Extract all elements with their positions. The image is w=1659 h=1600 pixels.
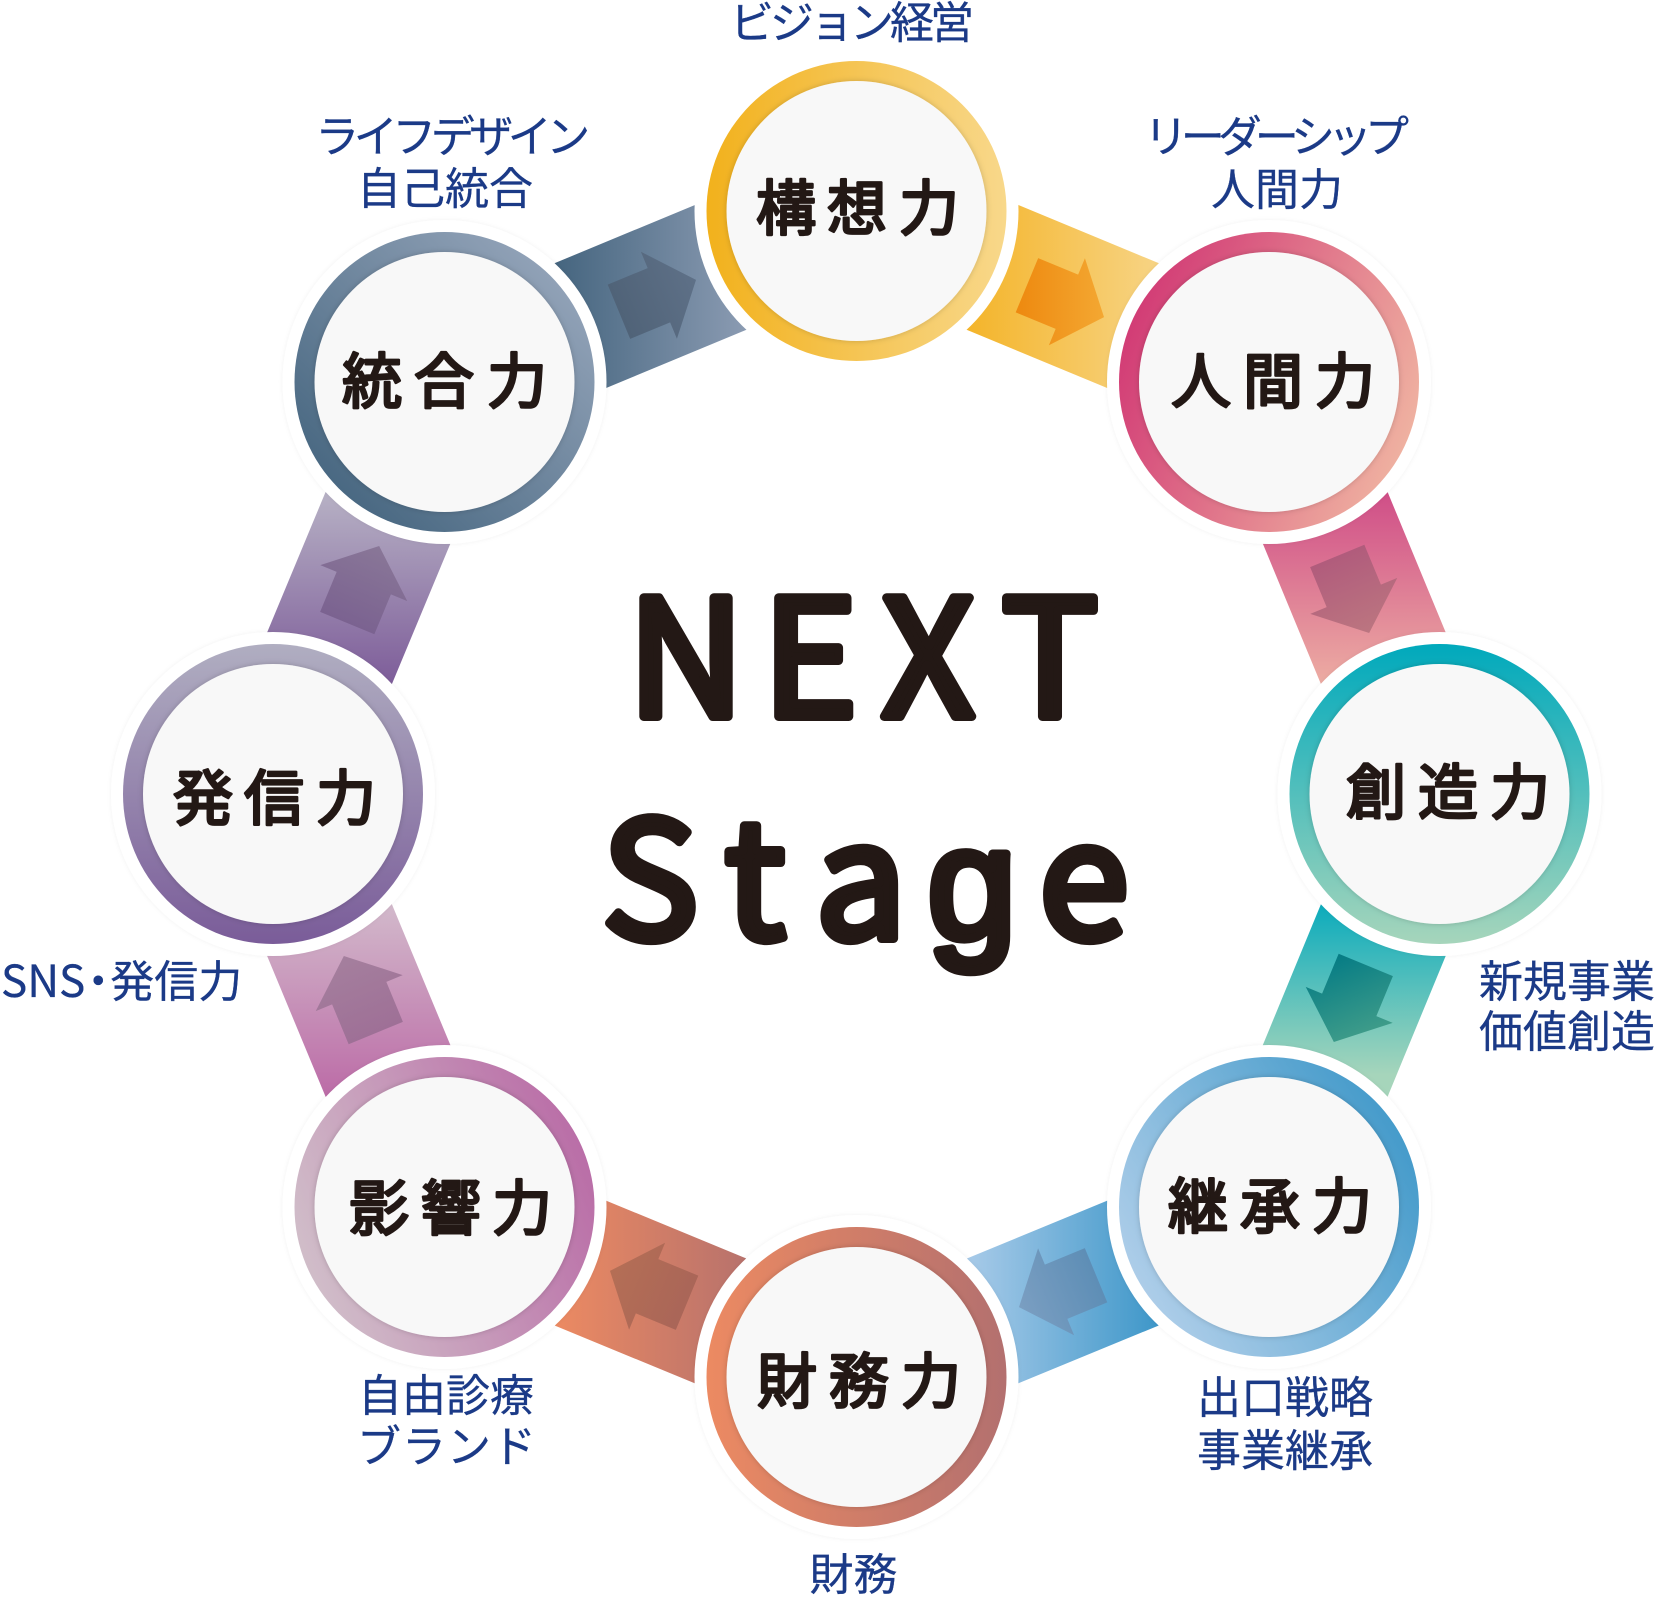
label: リーダーシップ 人間力: リーダーシップ [1144,101,1409,165]
label: SNS・発信力: SNS・発信力 [1,946,242,1010]
circle: 統合力 [282,220,606,544]
label: 出口戦略 事業継承: 出口戦略 [1197,1362,1373,1426]
label: ライフデザイン 自己統合 [315,101,587,217]
circle: 人間力 [1107,220,1431,544]
circle: 人間力: 人間力 [1171,334,1375,421]
label: 自由診療 ブランド [357,1360,537,1475]
center title: NEXT [627,528,1099,764]
label: 出口戦略 事業継承: 事業継承 [1197,1415,1373,1479]
label: ライフデザイン 自己統合: 自己統合 [357,153,533,217]
circle: 財務力 [694,1215,1018,1539]
connector band: 創造力 to 継承力 [1207,768,1502,1233]
label: 自由診療 ブランド: ブランド [357,1411,537,1475]
center title: Stage [602,750,1129,986]
connector band: 人間力 to 創造力 [1207,356,1502,820]
label: ライフデザイン 自己統合: ライフデザイン [315,101,587,165]
label: 新規事業 価値創造 [1479,946,1655,1060]
circle: 継承力 [1107,1045,1431,1369]
circle: 影響力 [282,1045,606,1369]
circle: 創造力 [1278,632,1602,956]
circle: 統合力: 統合力 [342,334,547,421]
circle: 構想力: 構想力 [756,161,959,248]
connector band: 財務力 to 影響力 [419,1145,882,1439]
label: 自由診療 ブランド: 自由診療 [358,1360,534,1424]
label: 新規事業 価値創造: 新規事業 [1479,946,1655,1010]
connector band: 発信力 to 統合力 [211,356,507,820]
circle: 発信力: 発信力 [173,751,376,838]
label: 新規事業 価値創造: 価値創造 [1479,996,1655,1060]
circle: 創造力: 創造力 [1346,745,1550,832]
connector band: 統合力 to 構想力 [419,149,882,444]
circle: 構想力 [694,49,1018,373]
circle: 財務力: 財務力 [757,1334,961,1421]
circle: 発信力 [111,632,435,956]
connector band: 影響力 to 発信力 [211,768,507,1233]
label: リーダーシップ 人間力: 人間力 [1211,154,1343,218]
center title [602,528,1129,986]
connector band: 継承力 to 財務力 [831,1145,1295,1439]
connector band: 構想力 to 人間力 [831,149,1295,444]
label: 出口戦略 事業継承 [1197,1362,1373,1479]
circle: 継承力: 継承力 [1168,1159,1372,1246]
label: リーダーシップ 人間力 [1144,101,1409,218]
circle: 影響力: 影響力 [349,1161,552,1248]
